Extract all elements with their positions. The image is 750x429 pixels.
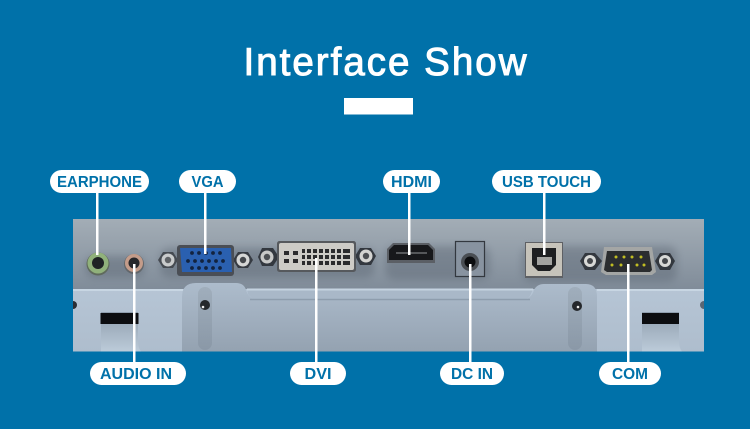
label: DVI: DVI bbox=[304, 366, 332, 383]
icon: DVI port bbox=[258, 241, 376, 272]
icon: VGA port bbox=[158, 245, 253, 276]
icon: COM port bbox=[580, 247, 675, 275]
label: DC IN bbox=[440, 264, 504, 385]
label: COM: COM bbox=[612, 366, 648, 383]
label: HDMI: HDMI bbox=[391, 174, 432, 191]
label: DVI bbox=[290, 258, 346, 385]
label: USB TOUCH: USB TOUCH bbox=[502, 174, 591, 191]
icon: audio in jack bbox=[124, 254, 144, 274]
label: VGA: VGA bbox=[192, 174, 224, 191]
title underline bar bbox=[344, 98, 413, 114]
label: AUDIO IN: AUDIO IN bbox=[100, 366, 172, 383]
icon: earphone jack bbox=[86, 252, 110, 276]
panel: monitor rear photo bbox=[73, 219, 704, 352]
icon: HDMI port bbox=[387, 243, 435, 263]
label: VGA bbox=[179, 170, 236, 254]
label: COM bbox=[599, 264, 661, 385]
label: USB TOUCH bbox=[492, 170, 601, 255]
label: AUDIO IN bbox=[90, 264, 186, 385]
label: EARPHONE: EARPHONE bbox=[57, 174, 142, 191]
label: HDMI bbox=[383, 170, 440, 255]
lower plate bbox=[73, 283, 704, 352]
title: Interface Show bbox=[244, 41, 527, 84]
icon: USB touch port bbox=[525, 242, 563, 278]
label: EARPHONE bbox=[50, 170, 149, 255]
label: DC IN: DC IN bbox=[451, 366, 493, 383]
icon: DC IN jack bbox=[456, 242, 484, 276]
